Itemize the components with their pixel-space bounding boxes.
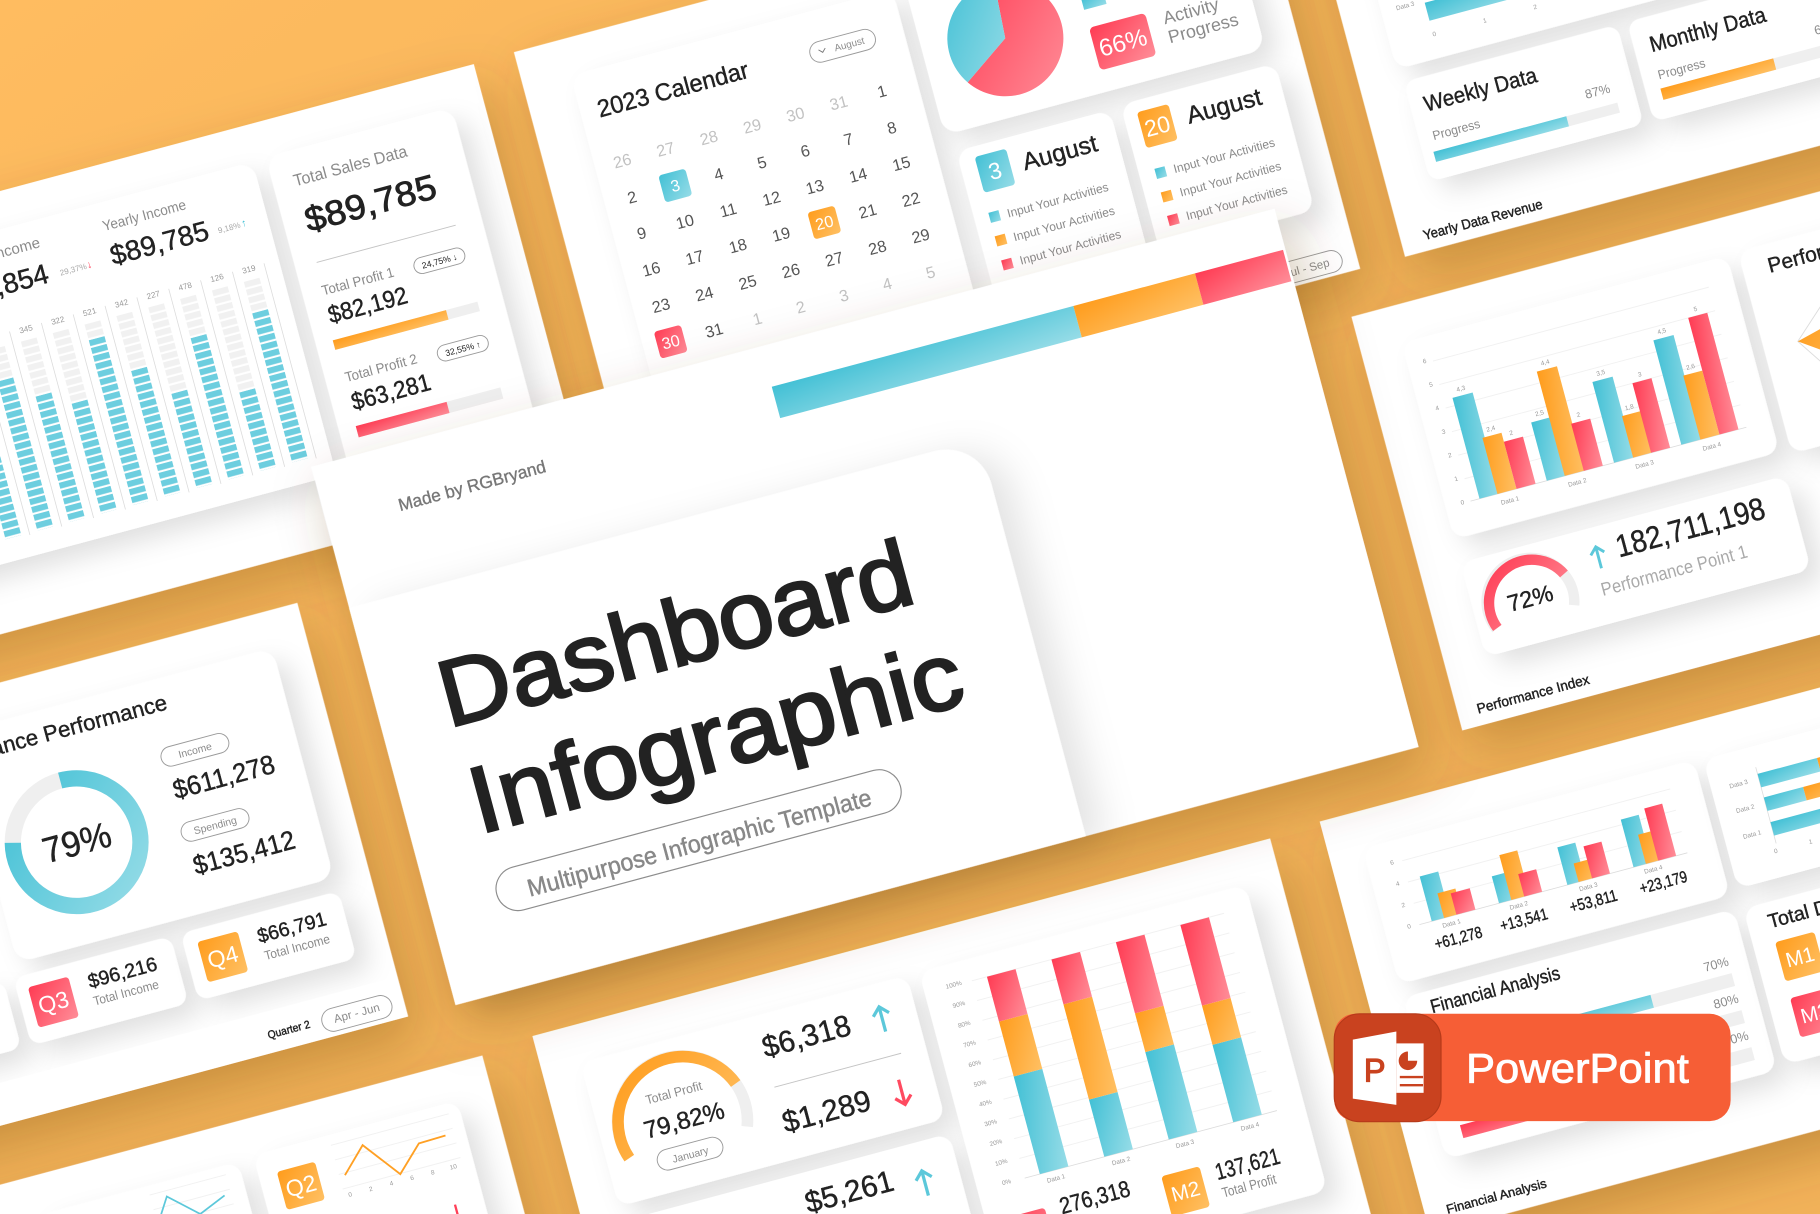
bars: Data 3 <box>1635 459 1655 471</box>
stacked bars: Data 4 <box>1240 1121 1261 1133</box>
panel: financial bar chart: 4 <box>1395 880 1401 888</box>
pill: Jul - Sep: Jul - Sep <box>1283 256 1331 281</box>
icon: PowerPoint logo: P <box>1364 1053 1386 1089</box>
stacked bars: Data 3 <box>1175 1138 1195 1150</box>
calendar grid: 13 <box>804 176 826 198</box>
panel: grouped bar chart: 3 <box>1441 428 1447 436</box>
bars: 2 <box>1509 429 1514 437</box>
icon: down arrow <box>891 1078 913 1107</box>
panel: 20 August: Input Your Activities <box>1172 135 1276 176</box>
calendar grid: 5 <box>924 263 937 283</box>
panel: financial bar chart: +23,179 <box>1638 868 1689 898</box>
panel: monthly data: Progress <box>1656 55 1707 82</box>
calendar grid: 9 <box>635 224 649 244</box>
panel: finance performance: Spending <box>193 815 238 837</box>
panel: horizontal stacked chart: Data 2 <box>1735 803 1756 815</box>
panel: stacked bar chart: 100% <box>945 980 963 991</box>
calendar grid: 18 <box>727 235 749 258</box>
pill: Apr - Jun: Apr - Jun <box>332 1001 381 1026</box>
panel: total sales data: 24,75% ↓ <box>421 252 458 271</box>
badge: PowerPoint <box>1334 1014 1731 1122</box>
slide: calendar <box>502 0 1360 466</box>
panel: Q2 line chart: 2 <box>368 1186 374 1193</box>
panel: activity progress <box>884 0 1265 135</box>
panel: stacked bar chart: M2 <box>1169 1177 1203 1207</box>
bars: Data 3 <box>1578 881 1599 893</box>
calendar grid: 30 <box>660 332 682 354</box>
calendar grid: 3 <box>669 176 682 196</box>
panel: horizontal stacked chart: 1 <box>1808 838 1814 846</box>
calendar grid: 3 <box>837 286 851 306</box>
bar columns: 345 <box>18 323 34 335</box>
slide: income bars <box>0 64 585 694</box>
panel: financial bar chart: +13,541 <box>1498 905 1550 935</box>
panel: performance point: 182,711,198 <box>1612 491 1769 564</box>
panel: finance performance <box>0 648 334 963</box>
panel: Q2 line chart: 8 <box>430 1169 436 1177</box>
panel: total data <box>1743 821 1820 1065</box>
panel: 3 August: August <box>1020 130 1101 176</box>
panel: yearly income chart: 29,37% <box>59 262 88 278</box>
panel: total sales data: Total Sales Data <box>291 141 410 190</box>
calendar grid: 26 <box>780 260 802 282</box>
panel: financial bar chart: 0 <box>1407 923 1412 931</box>
panel: grouped bar chart: 2 <box>1447 452 1453 460</box>
panel: stacked bar chart: 0% <box>1001 1178 1012 1187</box>
slide: Q2 charts <box>0 1056 593 1214</box>
panel: Q2 line chart: Q2 <box>283 1169 319 1202</box>
calendar grid: 22 <box>900 189 922 211</box>
pill: subtitle: Multipurpose Infographic Template <box>524 785 875 903</box>
pill: Apr - Jun <box>319 993 395 1034</box>
gauge: 72%: 72% <box>1504 580 1556 617</box>
slide: profit and stacked bars <box>532 838 1381 1214</box>
panel: stacked bar chart: 137,621 <box>1212 1143 1283 1185</box>
panel: yearly income chart: ↓ <box>86 259 93 271</box>
panel: total data: M1 <box>1783 943 1817 972</box>
bar columns: 322 <box>50 315 66 327</box>
panel: Q3: Total Income <box>92 977 160 1008</box>
panel: financial bar chart: 2 <box>1401 902 1407 910</box>
calendar grid <box>607 81 943 359</box>
panel: stacked bar chart: 50% <box>973 1079 988 1089</box>
calendar grid: 24 <box>693 283 716 306</box>
panel: weekly data <box>1404 25 1644 181</box>
panel: total sales data <box>266 107 545 505</box>
panel: 20 August: Input Your Activities <box>1178 159 1283 200</box>
title <box>427 514 973 854</box>
slide: yearly data revenue: Yearly Data Revenue <box>1421 196 1544 243</box>
panel: financial bar chart: +61,278 <box>1433 923 1484 953</box>
calendar grid: 29 <box>741 116 763 138</box>
bars: 3 <box>1637 371 1643 379</box>
panel: Q4: $66,791 <box>255 908 329 948</box>
panel: financial analysis progress: 70% <box>1702 954 1730 975</box>
panel: total sales data: Total Profit 1 <box>320 264 396 298</box>
panel: calendar: 2023 Calendar <box>594 57 752 123</box>
title: Dashboard <box>427 520 924 747</box>
badge: PowerPoint: PowerPoint <box>1466 1044 1689 1091</box>
calendar grid: 7 <box>842 130 855 150</box>
stacked bars: Data 2 <box>1111 1156 1132 1167</box>
icon: PowerPoint logo <box>1334 1014 1441 1122</box>
calendar grid: 26 <box>611 150 634 173</box>
bars: 2 <box>1576 411 1582 419</box>
panel: yearly income chart: Yearly Income <box>101 197 188 235</box>
panel: yearly income chart: ↑ <box>240 218 248 230</box>
pie chart <box>934 0 1076 109</box>
panel: weekly data: Weekly Data <box>1421 62 1540 117</box>
calendar grid: 31 <box>703 320 725 342</box>
panel: title card <box>349 439 1086 1005</box>
calendar grid: 12 <box>761 188 783 210</box>
panel: horizontal bars: Data 3 <box>1395 1 1416 12</box>
calendar grid: 1 <box>751 309 764 329</box>
bar columns: 342 <box>114 297 130 310</box>
panel: performance point <box>1461 476 1811 657</box>
bar columns: 126 <box>209 272 225 284</box>
panel: financial analysis progress: 70% <box>1722 1028 1750 1049</box>
bars: 4,3 <box>1456 385 1467 394</box>
bars: 1,8 <box>1624 403 1635 412</box>
calendar grid: 15 <box>890 153 913 175</box>
calendar grid: 31 <box>828 92 850 115</box>
colour bar <box>772 250 1291 418</box>
panel: Q3: $96,216 <box>86 953 160 993</box>
panel: financial bar chart <box>1363 760 1730 984</box>
calendar grid: 21 <box>857 201 879 223</box>
icon: down arrow <box>455 1205 461 1214</box>
panel: horizontal bars <box>1346 0 1820 69</box>
panel: teal line chart <box>37 1162 283 1214</box>
panel: 20 August: 20 <box>1142 110 1173 142</box>
panel: horizontal bars: 2 <box>1533 4 1538 11</box>
calendar grid: 2 <box>626 188 639 208</box>
bars: 4,4 <box>1540 358 1551 368</box>
panel: stacked bar chart: 10% <box>994 1158 1009 1168</box>
panel: Q2 line chart: 6 <box>410 1175 415 1182</box>
panel: total sales data: $82,192 <box>325 282 411 329</box>
slide: quarter 2 <box>0 603 408 1214</box>
text: made by: Made by RGBryand <box>396 456 548 515</box>
calendar grid: 16 <box>640 259 663 281</box>
bars: Data 2 <box>1567 477 1588 489</box>
panel: horizontal stacked chart: Data 3 <box>1729 779 1749 790</box>
slide: performance index: Performance Index <box>1475 671 1591 716</box>
calendar grid: 6 <box>799 142 812 161</box>
panel: 3 August: Input Your Activities <box>1012 204 1116 244</box>
bars: Data 1 <box>1500 495 1521 507</box>
panel: Q2 line chart <box>253 1101 502 1214</box>
icon: up arrow <box>1589 545 1608 570</box>
calendar grid: 19 <box>770 224 792 246</box>
stacked bars: Data 1 <box>1046 1173 1067 1185</box>
title: Infographic <box>457 621 973 853</box>
panel: stacked bar chart: 30% <box>984 1118 998 1128</box>
bars: Data 2 <box>1509 900 1529 912</box>
panel: horizontal stacked chart: Data 1 <box>1742 829 1763 841</box>
bars: 2,5 <box>1534 409 1545 418</box>
panel: financial bar chart: 6 <box>1389 859 1395 867</box>
bars: 4,5 <box>1657 327 1668 336</box>
panel: 3 August: Input Your Activities <box>1006 180 1110 221</box>
panel: weekly data: 87% <box>1583 81 1612 102</box>
calendar grid: 8 <box>885 118 899 138</box>
bars: Data 1 <box>1442 918 1462 930</box>
panel: grouped bar chart <box>1402 256 1779 539</box>
panel: $5,261 <box>623 1134 988 1214</box>
panel: stacked bar chart: Total Profit <box>1220 1171 1278 1200</box>
icon: up arrow <box>871 1005 894 1034</box>
panel: finance performance: Income <box>177 742 213 761</box>
bars: 3,5 <box>1596 369 1607 378</box>
panel: grouped bar chart: 1 <box>1454 475 1459 483</box>
panel: total sales data: 32,55% ↑ <box>444 339 482 358</box>
panel: activity progress: Progress <box>1166 9 1241 47</box>
bars: 2,6 <box>1685 363 1696 372</box>
panel: Q2 line chart: 0 <box>348 1191 353 1199</box>
calendar grid: 14 <box>847 165 869 187</box>
panel: horizontal stacked chart: 0 <box>1773 848 1779 855</box>
panel: yearly income chart: 9,18% <box>217 221 241 235</box>
panel: stacked bar chart: 20% <box>989 1138 1003 1148</box>
calendar grid: 28 <box>698 127 720 149</box>
panel: 20 August: Input Your Activities <box>1185 183 1289 223</box>
gauge: 79,82%: Total Profit <box>644 1078 704 1107</box>
stacked bars <box>987 917 1265 1186</box>
bar columns: 478 <box>177 280 193 293</box>
calendar grid: 28 <box>867 237 889 259</box>
calendar grid: 20 <box>814 212 836 234</box>
bars <box>1446 303 1742 512</box>
panel: stacked bar chart: 90% <box>952 1000 966 1010</box>
panel: Q2 line chart: 10 <box>449 1163 458 1172</box>
panel: stacked bar chart: 80% <box>957 1020 972 1030</box>
gauge: 79,82% <box>603 1041 757 1180</box>
bars: Data 4 <box>1643 864 1664 876</box>
panel: activity progress: 66% <box>1096 24 1150 63</box>
panel: total sales data: Total Profit 2 <box>343 350 419 385</box>
panel: Q4 <box>180 891 357 1001</box>
panel: monthly data: Monthly Data <box>1647 2 1769 57</box>
calendar grid: 4 <box>712 165 725 185</box>
panel: finance performance: $135,412 <box>190 825 298 881</box>
donut: 79% <box>0 764 155 920</box>
panel: monthly data <box>1627 0 1820 122</box>
panel: horizontal bars: 1 <box>1482 17 1488 25</box>
panel: Q2 line chart: 4 <box>389 1180 395 1188</box>
panel: grouped bar chart: 4 <box>1435 405 1440 413</box>
calendar grid: 27 <box>823 249 845 271</box>
bars: Data 4 <box>1702 441 1722 453</box>
icon: up arrow <box>914 1169 936 1198</box>
panel: total profit gauge <box>580 975 945 1206</box>
calendar grid: 17 <box>684 247 706 269</box>
panel: grouped bar chart: 5 <box>1428 381 1434 389</box>
bar columns: 227 <box>146 289 162 301</box>
panel: 20 August <box>1120 63 1314 252</box>
panel: Q4: Total Income <box>263 931 331 963</box>
pill: Jul - Sep <box>1262 248 1345 290</box>
panel: yearly income chart <box>0 162 336 626</box>
panel: stacked bar chart: 40% <box>978 1099 993 1109</box>
bars: 5 <box>1693 306 1699 313</box>
calendar grid: 5 <box>755 153 769 173</box>
calendar grid: 30 <box>785 104 807 126</box>
panel: total sales data: $63,281 <box>348 369 434 416</box>
panel: financial analysis progress: Financial Analysis <box>1428 963 1563 1018</box>
panel: 3 August: Input Your Activities <box>1018 227 1123 268</box>
panel: Q4: Q4 <box>204 940 241 974</box>
panel: calendar: August <box>833 36 866 54</box>
slide: financial analysis <box>1320 617 1820 1214</box>
panel: total profit gauge: $1,289 <box>779 1084 875 1140</box>
panel: finance performance: $611,278 <box>170 749 278 805</box>
panel: stacked bar chart: 70% <box>963 1039 977 1050</box>
calendar grid: 10 <box>674 211 696 233</box>
panel: total sales data: $89,785 <box>301 167 441 240</box>
panel: financial analysis progress <box>1403 909 1777 1159</box>
calendar grid: 23 <box>650 295 672 317</box>
panel: 3 August: 3 <box>986 157 1005 185</box>
panel: Q3 <box>13 936 188 1045</box>
panel: Q2 partial <box>0 981 21 1091</box>
bar columns: 521 <box>82 306 98 318</box>
panel: Q3: Q3 <box>35 986 72 1019</box>
slide: main title <box>311 209 1419 1005</box>
panel: horizontal stacked chart <box>1703 672 1820 889</box>
gauge: 79,82%: 79,82% <box>641 1097 728 1145</box>
bars <box>1418 804 1679 932</box>
slide: performance index <box>1351 120 1820 730</box>
panel: yearly income chart: $89,785 <box>107 215 212 271</box>
bar columns <box>0 261 316 541</box>
panel: grouped bar chart: 0 <box>1460 499 1466 507</box>
panel: horizontal bars: 0 <box>1432 31 1438 39</box>
slide: yearly data revenue <box>1277 0 1820 257</box>
calendar grid: 29 <box>910 225 932 248</box>
calendar grid: 2 <box>794 298 808 318</box>
panel: stacked bar chart: 60% <box>968 1059 982 1069</box>
slide: quarter 2: Quarter 2 <box>266 1019 312 1042</box>
panel: 3 August <box>956 110 1161 342</box>
donut: 79%: 79% <box>38 814 116 871</box>
gauge: 72% <box>1477 548 1577 630</box>
calendar grid: 4 <box>881 275 894 294</box>
bars: 2,4 <box>1486 425 1497 434</box>
panel: grouped bar chart: 6 <box>1422 358 1428 366</box>
panel: financial analysis progress: 80% <box>1712 991 1740 1012</box>
calendar grid: 1 <box>875 82 889 102</box>
calendar grid: 11 <box>718 200 739 221</box>
panel: 20 August: August <box>1184 84 1265 130</box>
panel: stacked bar chart <box>919 885 1327 1214</box>
panel: weekly data: Progress <box>1431 116 1482 143</box>
panel: calendar <box>571 0 985 423</box>
panel: radar <box>1738 159 1820 454</box>
calendar grid: 25 <box>737 272 759 294</box>
calendar grid: 27 <box>655 139 677 161</box>
gauge: 79,82%: January <box>671 1145 711 1166</box>
panel: financial bar chart: +53,811 <box>1568 887 1619 917</box>
bar columns: 319 <box>241 263 257 276</box>
panel: performance point: Performance Point 1 <box>1599 541 1750 600</box>
panel: total profit gauge: $6,318 <box>759 1009 855 1065</box>
